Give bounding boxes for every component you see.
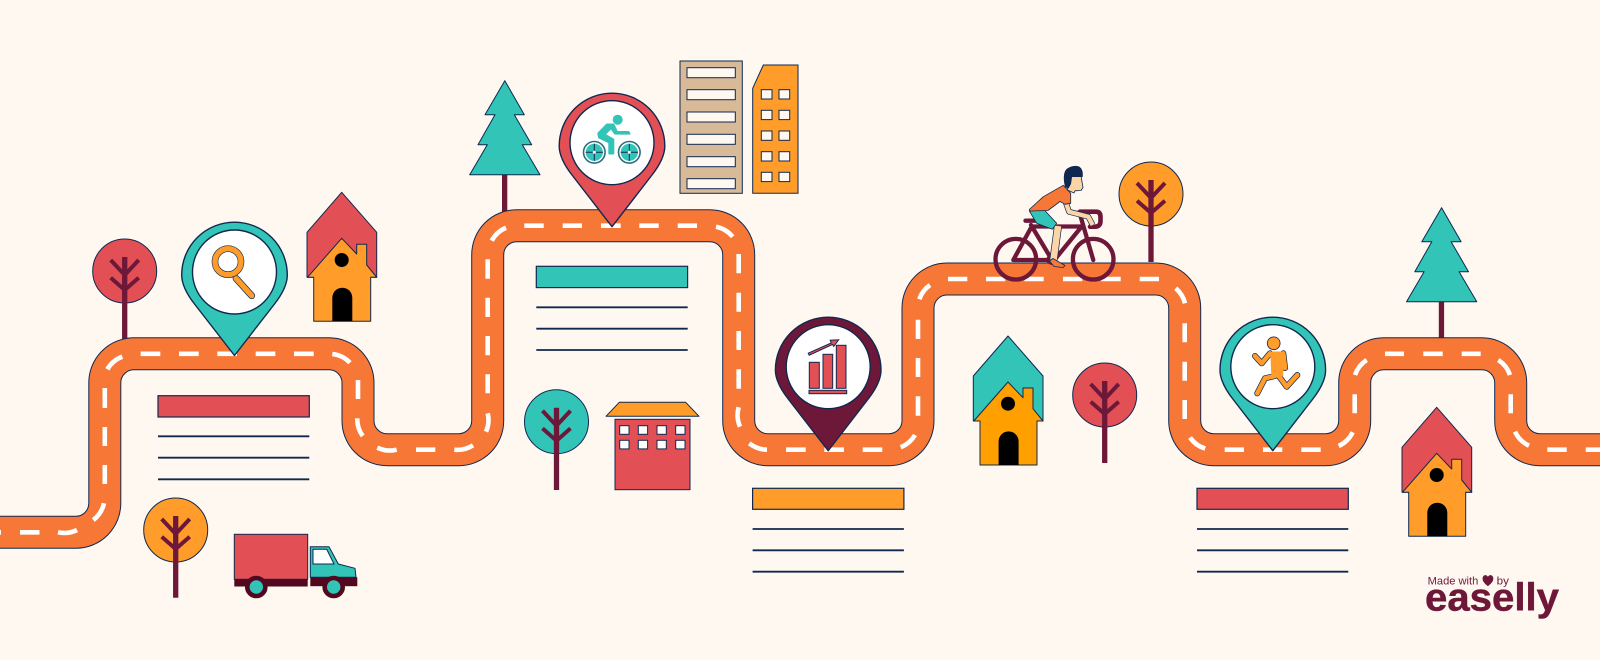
logo: made with love by easelly: easelly [1425,577,1559,620]
tree: teal round tree [524,390,588,490]
text block: fourth stop placeholder [1197,488,1348,572]
house: red roof house bottom right [1402,407,1472,536]
building: orange tower [753,65,798,193]
tree: orange round tree behind second hump [1119,162,1183,262]
building: red block with orange roof [606,402,699,490]
pin: red cycling marker [559,93,665,227]
illustration: man riding a bicycle [996,166,1113,280]
text block: first stop placeholder [158,396,309,479]
icon: rising bar chart with arrow [808,340,847,394]
icon: cyclist [584,115,640,163]
icon: magnifying glass [215,249,252,296]
pin: teal runner marker [1220,317,1326,451]
tree: teal pine on the right [1406,208,1477,339]
bicycle [996,212,1113,280]
house: teal roof house [973,336,1043,465]
icon: running person [1255,337,1297,393]
building: tan tower [680,61,742,193]
tree: teal pine above tall hump [470,81,540,212]
tree: red round tree under second hump [1073,363,1137,463]
pin: teal magnifier marker [182,222,287,356]
road: winding orange road with dashed centre line [0,226,1600,533]
truck [234,534,357,596]
logo: made with love by easelly: by [1497,575,1510,587]
logo: made with love by easelly: Made with [1428,575,1478,587]
pin: maroon growth chart marker [775,317,881,451]
house: red roof house top left [307,192,377,321]
tree: red round tree on first hump [93,239,157,339]
text block: third stop placeholder [753,488,904,572]
icon: heart [1483,575,1493,586]
tree: orange round tree lower left [144,498,208,598]
text block: second stop placeholder [536,266,688,350]
rider [1029,166,1093,268]
